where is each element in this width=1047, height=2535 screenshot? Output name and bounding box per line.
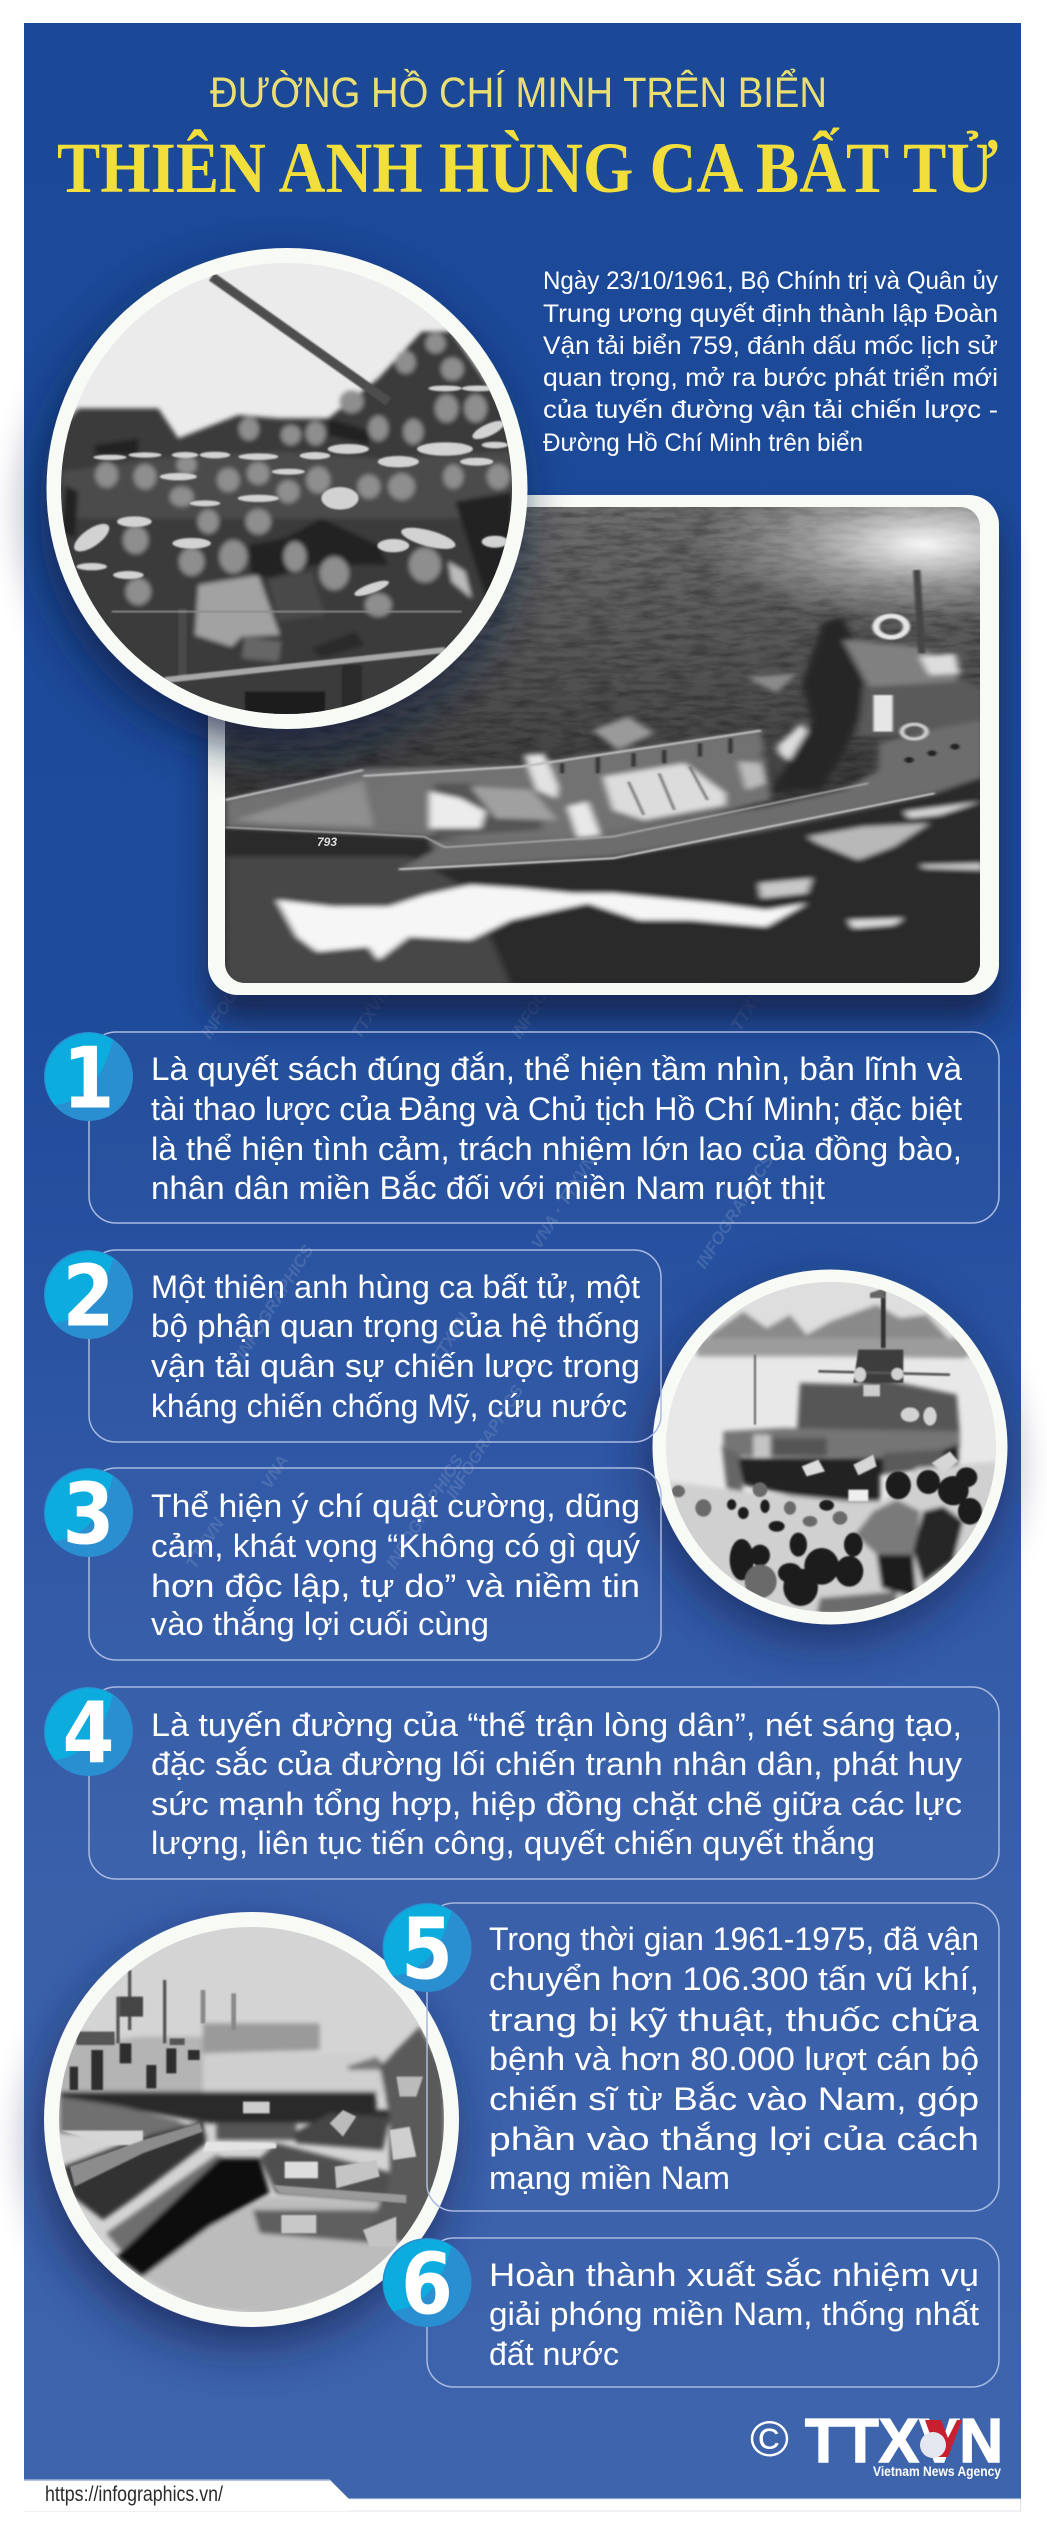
photo: boat and crowd in round frame	[649, 1268, 1010, 1640]
box 4 text: đặc sắc của đường lối chiến tranh nhân dân, phát huy	[151, 1746, 962, 1782]
logo: TTXVN: TTXVN	[805, 2407, 1003, 2476]
watermarks: INFOGRAPHICS	[442, 1381, 528, 1502]
badge 3: 3	[62, 1466, 114, 1564]
badge 2	[44, 1248, 133, 1346]
watermarks: INFOGRAPHICS	[232, 1241, 318, 1362]
box 3 text: Thể hiện ý chí quật cường, dũng	[151, 1488, 640, 1524]
box 3 text: vào thắng lợi cuối cùng	[151, 1606, 489, 1642]
box 4 text: sức mạnh tổng hợp, hiệp đồng chặt chẽ giữa các lực	[151, 1786, 962, 1822]
box 1 text: nhân dân miền Bắc đối với miền Nam ruột thịt	[151, 1170, 825, 1206]
intro text block: của tuyến đường vận tải chiến lược -	[543, 396, 998, 424]
box 2 text: kháng chiến chống Mỹ, cứu nước	[151, 1388, 627, 1424]
box 5 text: trang bị kỹ thuật, thuốc chữa	[489, 2002, 979, 2038]
badge 5: 5	[401, 1900, 453, 2000]
box 5 text: chiến sĩ từ Bắc vào Nam, góp	[489, 2081, 979, 2117]
box 1 text: là thể hiện tình cảm, trách nhiệm lớn lao của đồng bào,	[151, 1131, 962, 1167]
photo: ship at sea with white frame	[208, 495, 999, 1020]
box 6 text	[489, 2257, 979, 2372]
heading: subtitle: ĐƯỜNG HỒ CHÍ MINH TRÊN BIỂN	[210, 68, 827, 117]
box 5 text	[489, 1921, 979, 2196]
box 5 text: bệnh và hơn 80.000 lượt cán bộ	[489, 2041, 979, 2077]
watermarks: TTXVN	[182, 1514, 228, 1572]
box 3 outline	[89, 1468, 661, 1660]
box 2 text: bộ phận quan trọng của hệ thống	[151, 1308, 640, 1344]
intro text block: Ngày 23/10/1961, Bộ Chính trị và Quân ủy	[543, 267, 998, 295]
badge 1: 1	[62, 1030, 114, 1128]
box 2 text: Một thiên anh hùng ca bất tử, một	[151, 1269, 640, 1305]
photo: sailors group in round frame	[40, 240, 540, 750]
badge 4: 4	[62, 1684, 114, 1784]
badge 6: 6	[401, 2236, 453, 2334]
box 5 text: Trong thời gian 1961-1975, đã vận	[489, 1921, 979, 1957]
box 1 outline	[89, 1032, 999, 1223]
box 6 outline	[427, 2238, 999, 2387]
logo: TTXVN: Vietnam News Agency	[873, 2464, 1001, 2479]
box 5 text: phần vào thắng lợi của cách	[489, 2121, 979, 2157]
watermarks: INFOGRAPHICS	[382, 1451, 468, 1572]
footer bar	[24, 2480, 1020, 2511]
box 5 text: chuyển hơn 106.300 tấn vũ khí,	[489, 1961, 979, 1997]
intro text block: Đường Hồ Chí Minh trên biển	[543, 429, 863, 457]
logo: TTXVN: ©	[750, 2411, 789, 2467]
box 6 text: Hoàn thành xuất sắc nhiệm vụ	[489, 2257, 979, 2293]
box 1 text: tài thao lược của Đảng và Chủ tịch Hồ Chí Minh; đặc biệt	[151, 1091, 962, 1127]
watermarks: TTXVN · VNA	[347, 942, 420, 1042]
watermarks: INFOGRAPHICS	[507, 921, 593, 1042]
watermarks: INFOGRAPHICS	[197, 921, 283, 1042]
intro text block	[543, 267, 998, 457]
box 4 text: Là tuyến đường của “thế trận lòng dân”, nét sáng tạo,	[151, 1707, 962, 1743]
badge 3	[44, 1466, 133, 1564]
box 2 text: vận tải quân sự chiến lược trong	[151, 1348, 640, 1384]
box 3 text: cảm, khát vọng “Không có gì quý	[151, 1528, 640, 1564]
badge 6	[382, 2236, 472, 2334]
watermarks	[182, 921, 778, 1572]
watermarks: VNA · TTXVN	[527, 1151, 600, 1252]
box 2 text	[151, 1269, 640, 1424]
badge 5	[382, 1900, 472, 2000]
box 4 text	[151, 1707, 962, 1861]
intro text block: quan trọng, mở ra bước phát triển mới	[543, 364, 998, 392]
intro text block: Vận tải biển 759, đánh dấu mốc lịch sử	[543, 332, 998, 360]
badge 1	[44, 1030, 133, 1128]
box 1 text: Là quyết sách đúng đắn, thể hiện tầm nhìn, bản lĩnh và	[151, 1051, 962, 1087]
watermarks: VNA	[257, 1452, 292, 1492]
box 5 text: mạng miền Nam	[489, 2160, 730, 2196]
badge 4	[44, 1684, 133, 1784]
box 1 text	[151, 1051, 962, 1206]
box 5 outline	[427, 1903, 999, 2211]
watermarks: TTXVN	[727, 976, 773, 1034]
photo: harbour and soldiers in round frame	[41, 1910, 463, 2345]
box 6 text: đất nước	[489, 2336, 619, 2372]
box 4 outline	[89, 1687, 999, 1879]
ship number label: 793	[317, 835, 337, 849]
box 6 text: giải phóng miền Nam, thống nhất	[489, 2296, 979, 2332]
intro text block: Trung ương quyết định thành lập Đoàn	[543, 300, 998, 328]
watermarks: TTXVN	[427, 1309, 473, 1367]
source url: https://infographics.vn/	[45, 2483, 223, 2506]
badge 2: 2	[62, 1248, 114, 1346]
watermarks: INFOGRAPHICS	[692, 1151, 778, 1272]
box 4 text: lượng, liên tục tiến công, quyết chiến quyết thắng	[151, 1825, 875, 1861]
box 2 outline	[89, 1250, 661, 1442]
box 3 text: hơn độc lập, tự do” và niềm tin	[151, 1568, 640, 1604]
box 3 text	[151, 1488, 640, 1642]
